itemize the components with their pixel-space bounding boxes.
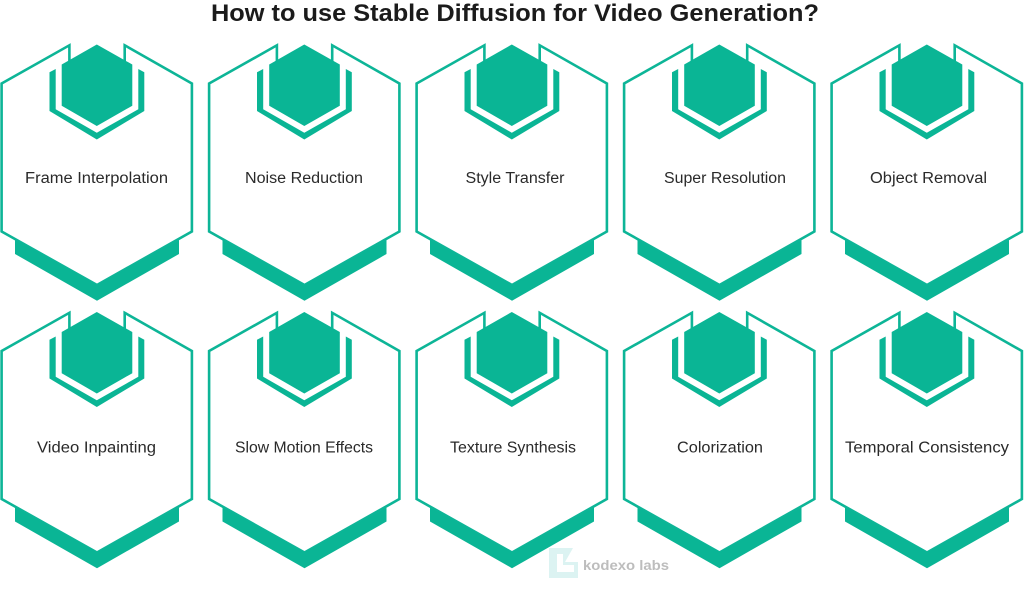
panel: Texture Synthesis: Texture Synthesis	[450, 440, 576, 456]
panel: Noise Reduction	[209, 44, 399, 301]
panel: Texture Synthesis	[417, 312, 607, 568]
panel: Object Removal	[832, 44, 1022, 301]
panel: Colorization	[624, 312, 814, 568]
panel: Noise Reduction: Noise Reduction	[245, 170, 363, 187]
panel: Frame Interpolation	[2, 44, 192, 301]
panel: Super Resolution	[624, 44, 814, 301]
panel: Slow Motion Effects	[209, 312, 399, 568]
panel: Temporal Consistency: Temporal Consistency	[845, 440, 1009, 456]
panel: Style Transfer: Style Transfer	[466, 170, 564, 187]
panel: Colorization: Colorization	[677, 440, 763, 456]
title: How to use Stable Diffusion for Video Generation?	[211, 0, 819, 27]
panel: Slow Motion Effects: Slow Motion Effects	[235, 440, 373, 456]
logo: kodexo labs	[549, 548, 669, 578]
panel: Super Resolution: Super Resolution	[664, 170, 786, 187]
panel: Video Inpainting: Video Inpainting	[37, 440, 156, 456]
panel: Frame Interpolation: Frame Interpolation	[25, 170, 168, 187]
panel: Object Removal: Object Removal	[870, 170, 987, 187]
panel: Video Inpainting	[2, 312, 192, 568]
panel: Style Transfer	[417, 44, 607, 301]
icon: logo mark	[549, 548, 578, 578]
logo wordmark: kodexo labs	[583, 557, 669, 573]
panel: Temporal Consistency	[832, 312, 1022, 568]
